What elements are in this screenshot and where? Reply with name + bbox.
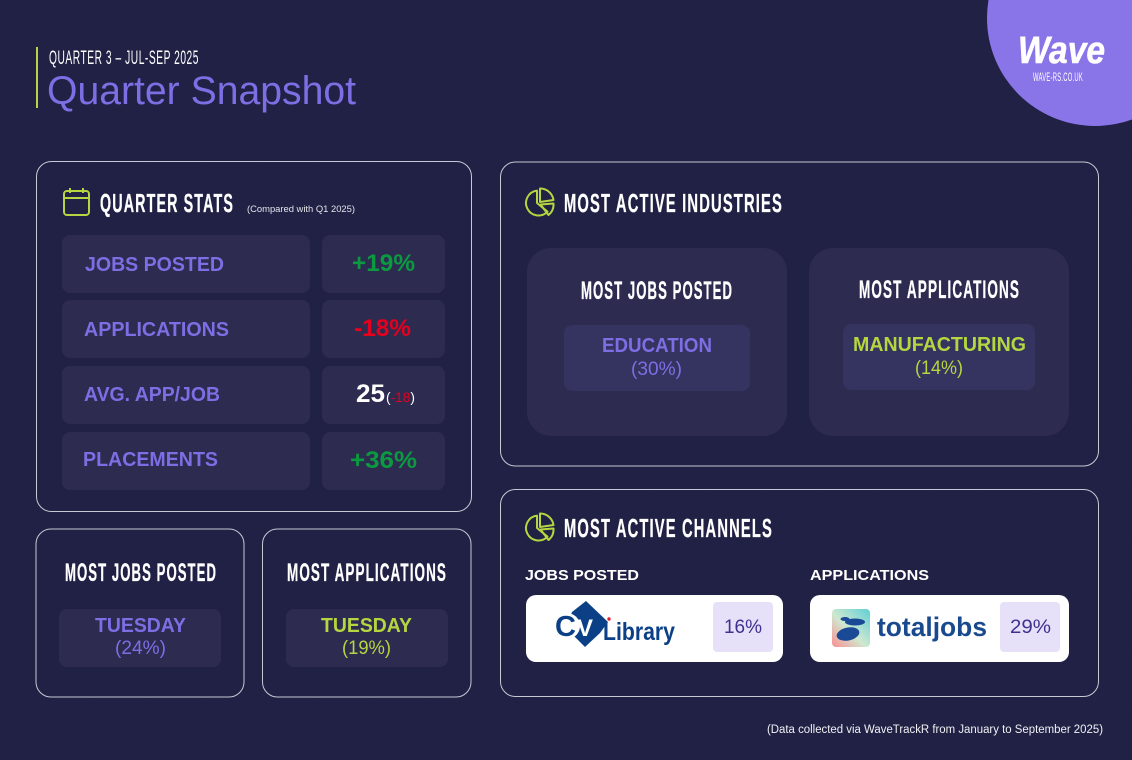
card: cv-library: 16%: [724, 617, 762, 638]
card: most applications industry: [809, 248, 1069, 436]
comparison note: (Compared with Q1 2025): [247, 204, 355, 214]
row: average applications per job: 25: [356, 380, 385, 408]
panel: most jobs posted day: TUESDAY: [95, 615, 187, 637]
card: totaljobs: [810, 595, 1069, 662]
card: most applications industry: MANUFACTURING: [853, 334, 1026, 356]
logo: totaljobs: totaljobs: [877, 612, 987, 642]
heading: quarter stats: QUARTER STATS: [100, 190, 234, 218]
heading: most active channels: MOST ACTIVE CHANNELS: [564, 515, 773, 543]
row: average applications per job: AVG. APP/JOB: [84, 383, 220, 406]
card: cv-library: [526, 595, 783, 662]
card: most jobs posted industry: MOST JOBS POSTED: [581, 277, 733, 305]
card: most jobs posted industry: (30%): [631, 359, 682, 380]
panel: most applications day: (19%): [342, 638, 391, 659]
title block: [36, 47, 356, 113]
logo: totaljobs: [832, 609, 987, 647]
card: totaljobs: 29%: [1010, 617, 1051, 638]
row: placements: +36%: [350, 447, 417, 474]
row: average applications per job: (-18): [386, 389, 415, 405]
row: applications: APPLICATIONS: [84, 318, 229, 341]
panel: most jobs posted day: (24%): [115, 638, 166, 659]
row: jobs posted: JOBS POSTED: [85, 253, 224, 276]
panel: quarter stats: [36, 162, 472, 512]
panel: most jobs posted day: MOST JOBS POSTED: [65, 559, 217, 587]
row: applications: -18%: [354, 315, 411, 342]
panel: most jobs posted day: [36, 529, 244, 697]
card: most jobs posted industry: [527, 248, 787, 436]
label: jobs posted: JOBS POSTED: [525, 567, 639, 584]
logo: cv-library: V: [577, 615, 593, 642]
card: most jobs posted industry: EDUCATION: [602, 335, 712, 357]
heading: most active industries: MOST ACTIVE INDUSTRIES: [564, 190, 783, 218]
panel: most applications day: TUESDAY: [321, 615, 413, 637]
row: jobs posted: +19%: [352, 250, 415, 277]
logo badge: WAVE-RS.CO.UK: [1033, 72, 1083, 84]
row: applications: [62, 300, 445, 358]
icon: pie chart: [526, 513, 554, 541]
row: average applications per job: [62, 366, 445, 424]
title block: Quarter Snapshot: [47, 69, 356, 113]
title block: QUARTER 3 – JUL-SEP 2025: [49, 48, 199, 69]
icon: pie chart: [526, 188, 554, 216]
logo badge: Wave: [1018, 30, 1105, 72]
logo badge: [987, 0, 1132, 126]
panel: most applications day: [262, 529, 471, 697]
row: jobs posted: [62, 235, 445, 293]
row: placements: PLACEMENTS: [83, 448, 218, 471]
logo: cv-library: [554, 601, 675, 647]
panel: most applications day: MOST APPLICATIONS: [287, 559, 447, 587]
card: most applications industry: (14%): [915, 358, 963, 379]
panel: most active channels: [500, 490, 1098, 696]
footnote: (Data collected via WaveTrackR from January to September 2025): [767, 724, 1103, 736]
row: placements: [62, 432, 445, 490]
icon: calendar: [64, 188, 89, 215]
panel: most active industries: [500, 162, 1098, 466]
logo: cv-library: C: [555, 611, 576, 643]
logo: cv-library: Library: [603, 618, 675, 646]
label: applications: APPLICATIONS: [810, 567, 929, 584]
